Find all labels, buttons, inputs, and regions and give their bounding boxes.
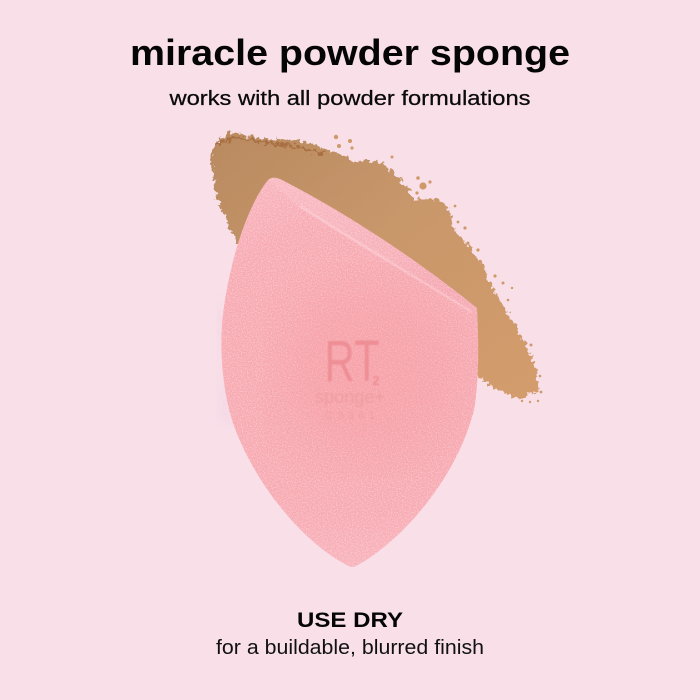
sponge logo: C3361 <box>325 410 375 422</box>
powder dark edge <box>216 137 325 155</box>
subtitle: works with all powder formulations <box>168 88 530 110</box>
sponge <box>221 178 478 567</box>
sponge center tint <box>290 288 456 456</box>
sponge shadow <box>218 300 232 420</box>
sponge top facet <box>268 178 477 312</box>
sponge grain <box>222 178 478 566</box>
sponge logo: 2 <box>372 373 380 388</box>
powder swatch <box>212 132 542 403</box>
powder specks <box>334 135 542 403</box>
sponge facet highlight <box>300 206 472 312</box>
sponge logo <box>315 329 385 422</box>
title: miracle powder sponge <box>130 32 570 73</box>
heading: use dry: USE DRY <box>297 608 403 632</box>
sponge logo: RT <box>324 329 380 394</box>
sponge logo: sponge+ <box>315 387 385 407</box>
caption: for a buildable, blurred finish <box>216 637 484 659</box>
